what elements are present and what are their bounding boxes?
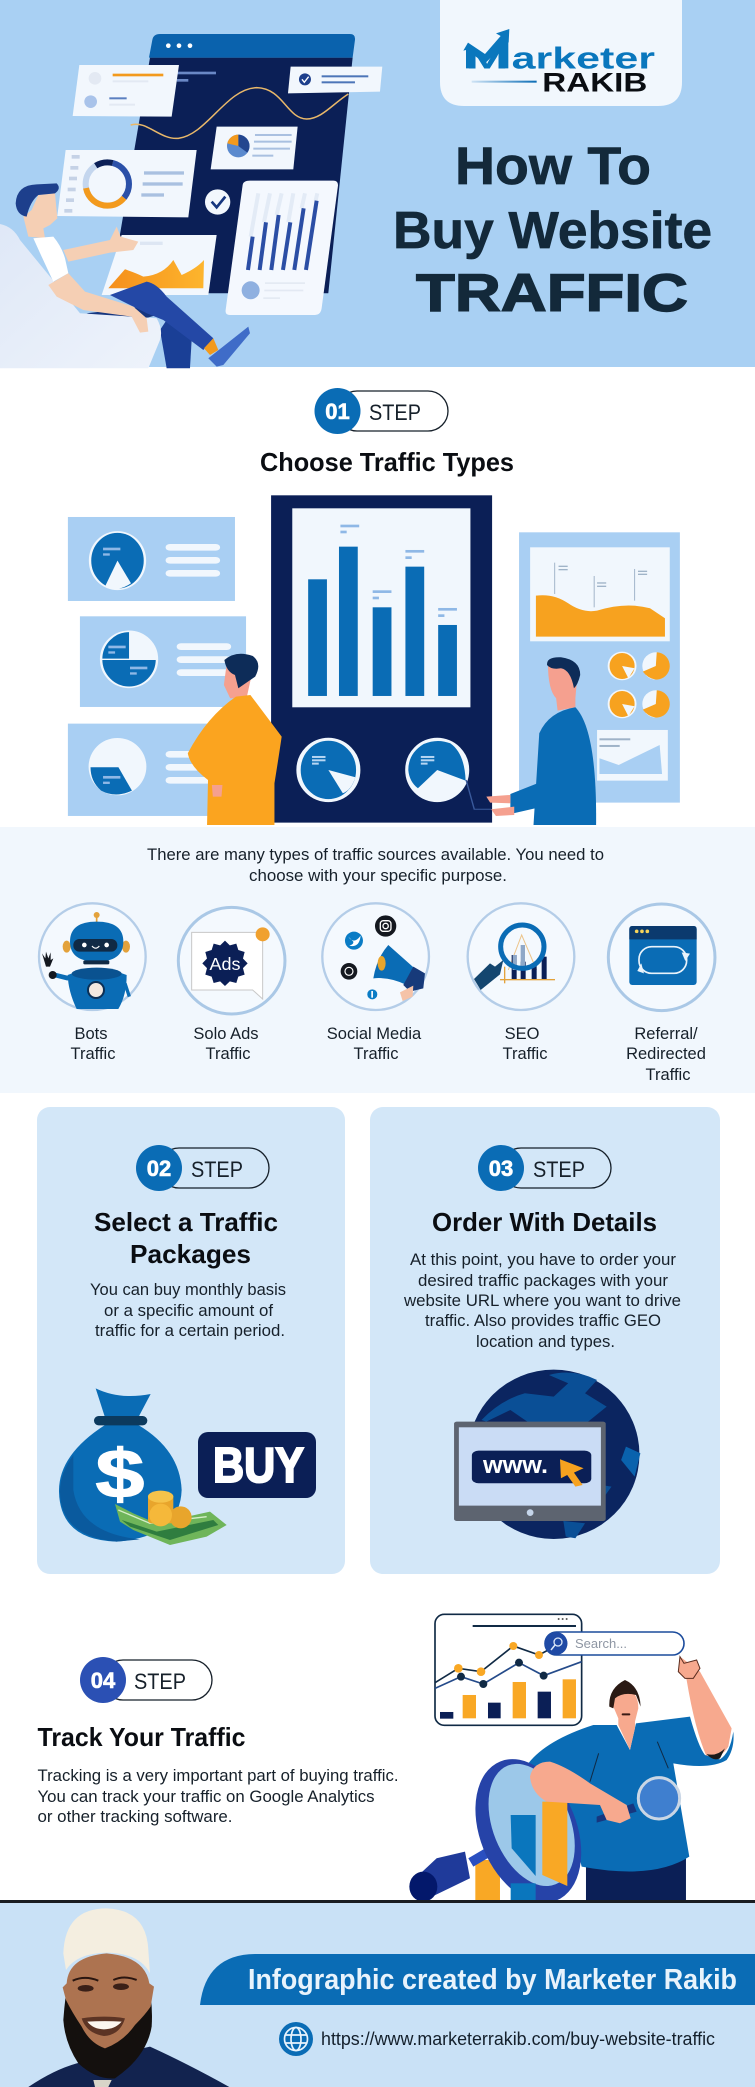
icon: globe: [279, 2022, 313, 2056]
text: step 04 description: You can track your traffic on Google Analytics: [38, 1787, 374, 1806]
labels: traffic types: [71, 1025, 706, 1084]
text: step 04 description: or other tracking software.: [38, 1807, 232, 1826]
labels: traffic types: Bots: [74, 1025, 108, 1043]
illustration: step 01 dashboards and two people: [68, 495, 680, 825]
banner: credit: [200, 1954, 755, 2005]
step 02 badge: [136, 1145, 269, 1191]
labels: traffic types: Social Media: [327, 1025, 422, 1043]
title: How To: [455, 137, 651, 196]
icon: solo ads: [178, 907, 285, 1014]
heading: select a traffic packages: Select a Traffic: [94, 1207, 278, 1237]
icon: seo: [468, 903, 574, 1010]
text: step 03 description: website URL where you want to drive: [403, 1291, 681, 1310]
text: step 03 description: traffic. Also provides traffic GEO: [425, 1311, 661, 1330]
text: intro: choose with your specific purpose.: [249, 866, 507, 885]
text: intro: [147, 845, 604, 885]
step 03 badge: 03: [489, 1156, 513, 1181]
illustration: man at analytics dashboard: [0, 34, 382, 368]
panel: footer: [0, 1900, 755, 2087]
text: step 04 description: Tracking is a very important part of buying traffic.: [38, 1766, 398, 1785]
heading: order with details: Order With Details: [432, 1207, 657, 1237]
step 01 badge: [314, 388, 448, 434]
text: step 02 description: [90, 1280, 286, 1340]
step 04 badge: [80, 1657, 212, 1703]
text: intro: There are many types of traffic sources available. You need to: [147, 845, 604, 864]
text: step 03 description: [403, 1250, 681, 1351]
text: step 02 description: You can buy monthly basis: [90, 1280, 286, 1299]
text: step 02 description: or a specific amount of: [104, 1301, 273, 1320]
title: TRAFFIC: [416, 264, 688, 323]
icon: money bag with cash: $: [96, 1436, 144, 1512]
heading: track your traffic: Track Your Traffic: [38, 1722, 246, 1752]
labels: traffic types: Solo Ads: [193, 1025, 259, 1043]
icon: bots traffic robot: [39, 903, 146, 1010]
portrait: marketer rakib: [28, 1908, 229, 2087]
big magnifier: [409, 1743, 601, 1919]
heading: choose traffic types: Choose Traffic Types: [260, 447, 514, 477]
logo wordmark: M: [465, 44, 509, 74]
title: [393, 137, 712, 323]
icon: social media: [322, 903, 429, 1010]
logo wordmark: RAKIB: [542, 68, 647, 98]
labels: traffic types: Traffic: [503, 1045, 547, 1063]
icon: referral redirected window: [608, 904, 715, 1011]
chart window: [435, 1614, 582, 1725]
icon: money bag with cash: [59, 1388, 227, 1545]
step 01 badge: 01: [325, 399, 350, 424]
text: step 04 description: [38, 1766, 398, 1826]
step 03 badge: [478, 1145, 611, 1191]
text: step 03 description: location and types.: [476, 1332, 615, 1351]
panel: step 03 card: [370, 1107, 720, 1574]
panel: logo: [440, 0, 682, 106]
step 03 badge: STEP: [533, 1157, 585, 1182]
icon: globe with monitor: www.: [482, 1452, 548, 1479]
panel: step 02 card: [37, 1107, 345, 1574]
logo wordmark: [463, 29, 655, 98]
step 01 badge: STEP: [369, 400, 421, 425]
text: url: https://www.marketerrakib.com/buy-website-traffic: [321, 2029, 715, 2049]
labels: traffic types: Redirected: [626, 1045, 706, 1063]
icon: solo ads: Ads: [209, 954, 240, 974]
labels: traffic types: Traffic: [354, 1045, 398, 1063]
forearm and small magnifier: [530, 1762, 680, 1823]
text: step 03 description: desired traffic packages with your: [418, 1271, 668, 1290]
labels: traffic types: Traffic: [206, 1045, 250, 1063]
heading: select a traffic packages: [94, 1207, 278, 1269]
search box: [544, 1632, 684, 1655]
labels: traffic types: Traffic: [71, 1045, 115, 1063]
icon: globe with monitor: [454, 1370, 640, 1539]
step 02 badge: 02: [147, 1156, 171, 1181]
body and arms: [528, 1657, 734, 1902]
step 04 badge: STEP: [134, 1669, 186, 1694]
logo wordmark: arketer: [512, 41, 655, 75]
text: step 02 description: traffic for a certain period.: [95, 1321, 285, 1340]
title: Buy Website: [393, 202, 712, 260]
labels: traffic types: Traffic: [646, 1066, 690, 1084]
labels: traffic types: Referral/: [634, 1025, 698, 1043]
text: step 03 description: At this point, you have to order your: [410, 1250, 676, 1269]
search box: Search...: [575, 1636, 627, 1651]
labels: traffic types: SEO: [505, 1025, 540, 1043]
step 02 badge: STEP: [191, 1157, 243, 1182]
step 04 badge: 04: [91, 1668, 116, 1693]
panel: header: [0, 0, 755, 368]
illustration: man tracking analytics with magnifiers: [409, 1614, 734, 1919]
heading: select a traffic packages: Packages: [130, 1239, 251, 1269]
panel: traffic sources band: [0, 827, 755, 1093]
button: buy: BUY: [213, 1439, 304, 1493]
